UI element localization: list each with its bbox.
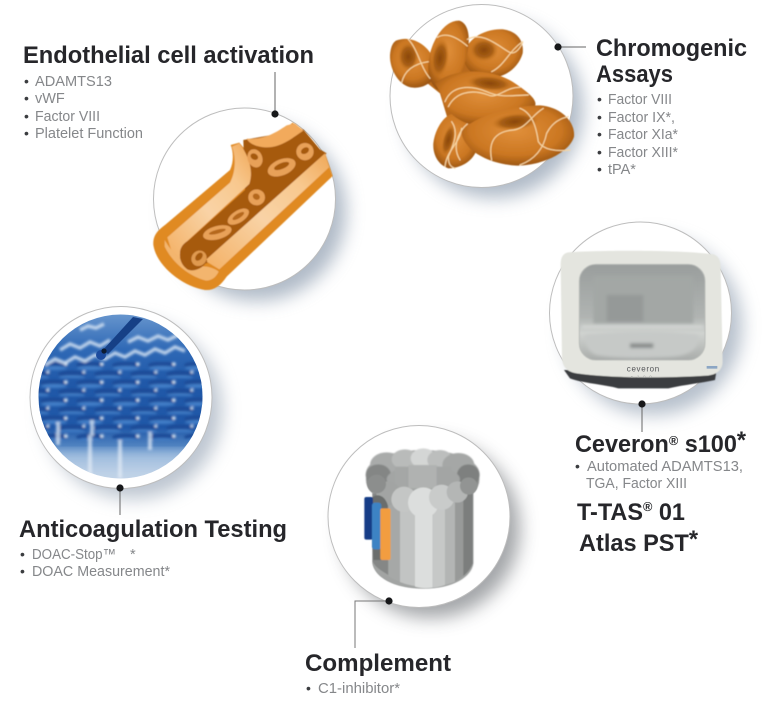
- text block: ceveron description: Automated ADAMTS13,: [587, 459, 743, 475]
- heading: Atlas PST: Atlas PST: [579, 530, 691, 557]
- panel: ceveron device illustration: [550, 222, 742, 432]
- heading: complement: Complement: [305, 650, 451, 677]
- panel: chromogenic assays illustration: [390, 4, 586, 198]
- list: complement tests: •: [306, 680, 311, 696]
- heading: ceveron s100: *: [737, 427, 747, 454]
- heading: Atlas PST: *: [689, 526, 699, 553]
- heading: ceveron s100: s100: [678, 431, 737, 458]
- connector: ceveron: [638, 400, 646, 432]
- text block: ceveron description: •: [575, 458, 580, 474]
- icon: ceveron s100 analyser: ceveron: [627, 365, 660, 374]
- heading: T-TAS 01: ®: [643, 499, 653, 514]
- text block: ceveron description: TGA, Factor XIII: [586, 476, 687, 492]
- heading: ceveron s100: [575, 427, 747, 458]
- icon: pipette tip: [96, 317, 143, 360]
- list: chromogenic factors: •: [597, 109, 602, 125]
- icon: pipette over blue microplate: [35, 312, 207, 482]
- heading: T-TAS 01: 01: [652, 499, 685, 526]
- list: complement tests: C1-inhibitor*: [318, 681, 400, 697]
- icon: ceveron s100 analyser: s100: [631, 374, 656, 379]
- list: anticoagulation tests: •: [20, 563, 25, 579]
- list: chromogenic factors: Factor XIII*: [608, 145, 678, 161]
- list: chromogenic factors: •: [597, 161, 602, 177]
- list: chromogenic factors: Factor VIII: [608, 92, 672, 108]
- heading: anticoagulation testing: Anticoagulation Testing: [19, 516, 287, 543]
- list: chromogenic factors: •: [597, 126, 602, 142]
- heading: chromogenic assays: Chromogenic: [596, 35, 747, 62]
- icon: red blood cell cluster: [390, 21, 574, 168]
- list: chromogenic factors: •: [597, 91, 602, 107]
- panel: complement illustration: [328, 426, 520, 648]
- list: anticoagulation tests: [20, 546, 170, 580]
- connector: complement: [355, 597, 393, 648]
- heading: chromogenic assays: [596, 35, 747, 88]
- list: anticoagulation tests: *: [130, 547, 136, 563]
- list: endothelial markers: Platelet Function: [35, 126, 143, 142]
- heading: ceveron s100: ®: [669, 433, 679, 448]
- text block: ceveron description: [575, 458, 743, 492]
- heading: ceveron s100: Ceveron: [575, 431, 671, 458]
- list: endothelial markers: Factor VIII: [35, 109, 100, 125]
- panel: anticoagulation testing illustration: [30, 306, 222, 515]
- connector: anticoagulation: [116, 484, 124, 515]
- list: endothelial markers: vWF: [35, 91, 65, 107]
- heading: endothelial cell activation: Endothelial cell activation: [23, 42, 314, 69]
- list: chromogenic factors: •: [597, 144, 602, 160]
- icon: ceveron s100 analyser: [561, 251, 723, 388]
- connector: endothelial: [271, 72, 279, 118]
- heading: T-TAS 01: T-TAS: [577, 499, 645, 526]
- list: chromogenic factors: tPA*: [608, 162, 636, 178]
- list: endothelial markers: ADAMTS13: [35, 74, 112, 90]
- connector: chromogenic: [554, 43, 586, 51]
- panel: endothelial cell activation illustration: [153, 72, 346, 301]
- list: chromogenic factors: Factor IX*,: [608, 110, 675, 126]
- list: chromogenic factors: Factor XIa*: [608, 127, 678, 143]
- heading: chromogenic assays: Assays: [596, 61, 673, 88]
- list: chromogenic factors: [597, 91, 678, 178]
- list: endothelial markers: •: [24, 125, 29, 141]
- icon: complement pore cylinder: [364, 448, 480, 588]
- list: endothelial markers: •: [24, 73, 29, 89]
- list: endothelial markers: [24, 73, 143, 142]
- list: anticoagulation tests: DOAC-Stop™: [32, 547, 116, 563]
- list: endothelial markers: •: [24, 90, 29, 106]
- list: anticoagulation tests: •: [20, 546, 25, 562]
- list: endothelial markers: •: [24, 108, 29, 124]
- icon: cut-away blood vessel: [153, 123, 333, 290]
- list: anticoagulation tests: DOAC Measurement*: [32, 564, 170, 580]
